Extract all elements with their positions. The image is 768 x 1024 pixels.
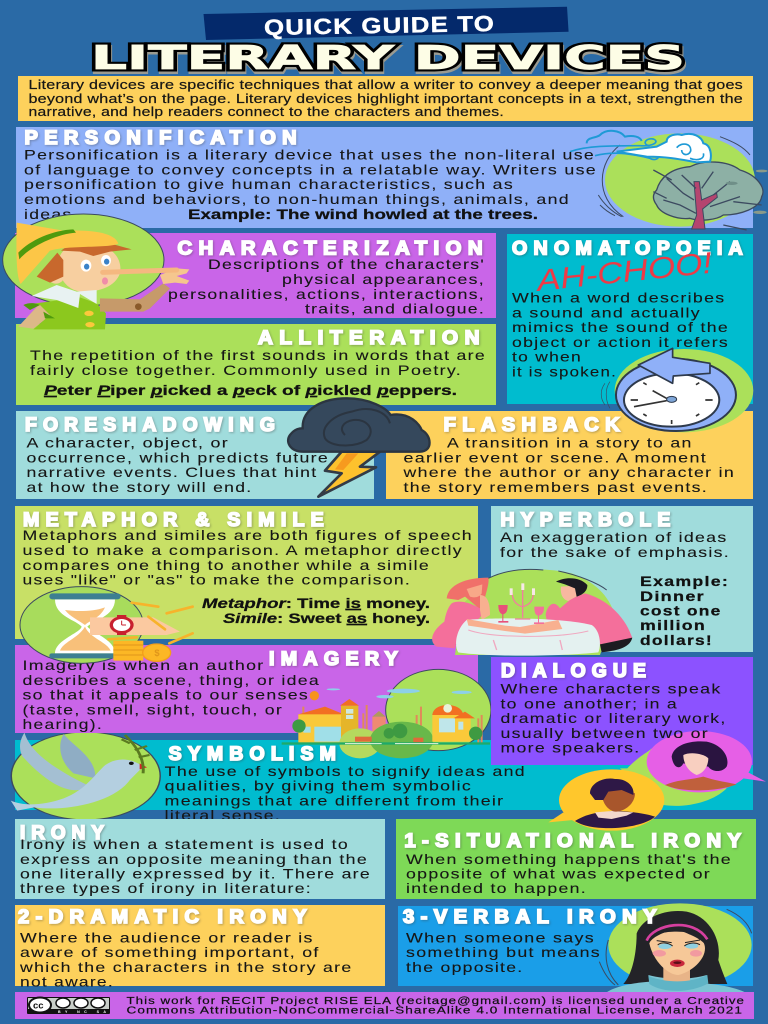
text: onomatopoeia: object or action it refers <box>512 335 729 350</box>
example: hyperbole <box>640 573 729 648</box>
icon: hourglass, watch and coins: $ <box>154 648 160 658</box>
heading: verbal irony: 3-VERBAL IRONY <box>403 907 663 928</box>
text: foreshadowing: A character, object, or <box>26 436 229 451</box>
text: flashback: A transition in a story to an <box>447 436 693 451</box>
heading: dialogue: DIALOGUE <box>501 661 652 682</box>
text: dramatic irony: which the characters in the story are <box>19 960 353 975</box>
text: dialogue: dramatic or literary work, <box>500 711 726 726</box>
text: irony: one literally expressed by it. There are <box>20 867 371 882</box>
panel: dialogue <box>491 657 766 831</box>
panel: flashback <box>386 411 753 499</box>
text: foreshadowing: narrative events. Clues that hint <box>26 465 318 480</box>
text: dialogue: usually between two or <box>500 726 709 741</box>
text: metaphor and simile: used to make a comparison. A metaphor directly <box>22 543 463 558</box>
icon: couple at dinner table <box>432 569 632 656</box>
text: verbal irony: something but means <box>406 945 601 960</box>
icon: wind and tree <box>570 131 768 230</box>
text: onomatopoeia: When a word describes <box>512 291 726 306</box>
icon: creative commons badge <box>27 997 110 1014</box>
text: characterization: traits, and dialogue. <box>305 302 485 317</box>
text: dialogue <box>500 682 726 755</box>
intro panel <box>18 76 753 121</box>
banner: quick guide to <box>204 7 569 40</box>
text: characterization: Descriptions of the characters' <box>208 257 485 272</box>
panel: symbolism <box>11 732 753 823</box>
text: characterization: physical appearances, <box>282 272 485 287</box>
example: hyperbole: million <box>640 617 706 633</box>
heading: alliteration: ALLITERATION <box>258 328 486 349</box>
panel: irony <box>15 819 385 899</box>
icon: dove <box>11 732 160 820</box>
icon: clock with arrow <box>601 348 753 432</box>
text: irony: express an opposite meaning than the <box>20 852 368 867</box>
example: hyperbole: Dinner <box>640 588 705 604</box>
banner: quick guide to: QUICK GUIDE TO <box>264 11 495 40</box>
text: imagery: (taste, smell, sight, touch, or <box>22 702 283 717</box>
text: dramatic irony <box>19 930 353 990</box>
heading: imagery: IMAGERY <box>269 649 404 670</box>
heading: symbolism: SYMBOLISM <box>169 744 342 765</box>
text: imagery: describes a scene, thing, or idea <box>22 673 320 688</box>
text: personification: of language to convey concepts in a relatable way. Writers use <box>24 162 597 177</box>
heading: personification: PERSONIFICATION <box>24 128 303 149</box>
panel: onomatopoeia <box>507 234 753 432</box>
heading: dramatic irony: 2-DRAMATIC IRONY <box>18 907 313 928</box>
title: LITERARY DEVICES <box>91 38 685 77</box>
text: license: Commons Attribution-NonCommercial-ShareAlike 4.0 International License, March 2021 <box>126 1006 743 1016</box>
text: dialogue: more speakers. <box>500 740 640 755</box>
text: dramatic irony: aware of something important, of <box>20 945 320 960</box>
heading: flashback: FLASHBACK <box>444 415 626 436</box>
text: verbal irony: When someone says <box>406 931 595 946</box>
text: situational irony: opposite of what was expected or <box>406 867 711 882</box>
heading: foreshadowing: FORESHADOWING <box>25 415 281 436</box>
panel: metaphor and simile <box>15 506 478 663</box>
text: foreshadowing <box>26 436 329 495</box>
text: characterization <box>168 257 485 316</box>
heading: characterization: CHARACTERIZATION <box>178 239 489 260</box>
example: hyperbole: dollars! <box>640 632 713 648</box>
heading: irony: IRONY <box>20 823 110 844</box>
text: imagery <box>22 658 320 732</box>
text: symbolism: qualities, by giving them symbolic <box>165 779 472 794</box>
text: license <box>126 996 745 1016</box>
text: hyperbole: An exaggeration of ideas <box>500 530 728 545</box>
examples: metaphor and simile: Metaphor : Time is money. <box>202 595 430 611</box>
text: irony <box>20 837 371 896</box>
text: irony: three types of irony in literature: <box>20 881 312 896</box>
panel: verbal irony <box>398 903 753 1002</box>
icon: surprised girl <box>599 903 752 1002</box>
icon: creative commons badge: cc <box>33 1000 44 1012</box>
text: onomatopoeia: to when <box>512 349 582 364</box>
text: metaphor and simile: Metaphors and similes are both figures of speech <box>22 528 473 543</box>
panel: license footer <box>15 992 754 1019</box>
text: irony: Irony is when a statement is used to <box>20 837 349 852</box>
text: foreshadowing: occurrence, which predicts future <box>26 450 329 465</box>
icon: speech bubbles with two speakers <box>548 731 766 831</box>
text: dramatic irony: Where the audience or reader is <box>20 931 314 946</box>
text: characterization: personalities, actions, interactions, <box>168 287 485 302</box>
text: symbolism: The use of symbols to signify ideas and <box>165 764 526 779</box>
text: metaphor and simile: compares one thing to another while a simile <box>22 558 430 573</box>
text: metaphor and simile: uses "like" or "as" to make the comparison. <box>22 572 411 587</box>
title: LITERARY DEVICES <box>91 38 685 77</box>
intro panel: narrative, and help readers connect to the characters and themes. <box>28 105 504 119</box>
panel: characterization <box>3 214 496 329</box>
text: personification <box>24 148 597 222</box>
text: hyperbole: for the sake of emphasis. <box>500 545 730 560</box>
example: personification: Example: The wind howled at the trees. <box>188 206 538 222</box>
title: LITERARY DEVICES <box>92 40 686 80</box>
text: onomatopoeia: a sound and actually <box>512 305 701 320</box>
text: onomatopoeia: mimics the sound of the <box>512 320 729 335</box>
text: onomatopoeia: it is spoken. <box>512 364 617 379</box>
heading: onomatopoeia: ONOMATOPOEIA <box>512 239 749 260</box>
heading: metaphor and simile: METAPHOR & SIMILE <box>23 510 330 531</box>
text: flashback: the story remembers past events. <box>404 480 708 495</box>
text: verbal irony <box>406 930 601 975</box>
text: flashback <box>402 436 735 495</box>
text: personification: Personification is a literary device that uses the non-literal use <box>24 147 595 162</box>
text: flashback: where the author or any character in <box>402 465 735 480</box>
heading: situational irony: 1-SITUATIONAL IRONY <box>404 831 747 852</box>
icon: storm cloud and lightning <box>288 398 430 497</box>
text: imagery: Imagery is when an author <box>22 658 264 673</box>
text: symbolism: literal sense. <box>165 808 281 823</box>
panel: situational irony <box>396 819 756 899</box>
panel: alliteration <box>16 324 496 405</box>
text: license: This work for RECIT Project RISE ELA (recitage@gmail.com) is licensed under a Creative <box>126 996 745 1007</box>
text: personification: personification to give human characteristics, such as <box>24 177 514 192</box>
text: imagery: so that it appeals to our senses <box>22 687 309 702</box>
icon: hourglass, watch and coins <box>20 587 193 663</box>
text: alliteration: The repetition of the first sounds in words that are <box>30 348 486 363</box>
icon: pinocchio <box>3 214 189 329</box>
title <box>91 38 686 80</box>
heading: hyperbole: HYPERBOLE <box>500 510 676 531</box>
text: personification: emotions and behaviors, to non-human things, animals, and <box>24 192 570 207</box>
text: situational irony: intended to happen. <box>406 881 587 896</box>
examples: metaphor and simile: Simile : Sweet as honey. <box>223 610 430 626</box>
sound word: ah-choo: AH-CHOO! <box>533 247 715 298</box>
examples: metaphor and simile <box>202 595 430 626</box>
text: situational irony: When something happens that's the <box>406 852 732 867</box>
icon: town <box>282 669 491 758</box>
text: flashback: earlier event or scene. A moment <box>404 450 707 465</box>
text: alliteration: fairly close together. Commonly used in Poetry. <box>30 363 462 378</box>
text: dramatic irony: not aware. <box>20 975 114 990</box>
text: symbolism <box>165 764 526 823</box>
intro panel: Literary devices are specific techniques that allow a writer to convey a deeper meaning that goes <box>28 78 743 92</box>
text: hyperbole <box>500 530 730 560</box>
example: hyperbole: Example: <box>640 573 729 589</box>
text: personification: ideas <box>24 207 72 222</box>
icon: creative commons badge: BY NC SA <box>58 1010 106 1014</box>
panel: foreshadowing <box>16 411 374 499</box>
text: alliteration <box>30 348 486 378</box>
example: alliteration: Peter Piper picked a peck of pickled peppers. <box>44 382 457 398</box>
text: onomatopoeia <box>512 290 729 379</box>
intro panel: beyond what’s on the page. Literary devices highlight important concepts in a text, strengthen the <box>28 92 743 106</box>
panel: imagery <box>15 645 491 758</box>
text: dialogue: to one another; in a <box>500 696 678 711</box>
panel: dramatic irony <box>15 905 385 990</box>
text: symbolism: meanings that are different from their <box>165 793 504 808</box>
text: situational irony <box>406 852 732 896</box>
text: imagery: hearing). <box>22 717 103 732</box>
text: dialogue: Where characters speak <box>500 682 722 697</box>
text: metaphor and simile <box>22 528 473 587</box>
panel: personification <box>16 127 768 230</box>
example: hyperbole: cost one <box>640 602 722 618</box>
text: foreshadowing: at how the story will end. <box>26 480 252 495</box>
text: verbal irony: the opposite. <box>406 960 524 975</box>
panel: hyperbole <box>432 506 753 656</box>
